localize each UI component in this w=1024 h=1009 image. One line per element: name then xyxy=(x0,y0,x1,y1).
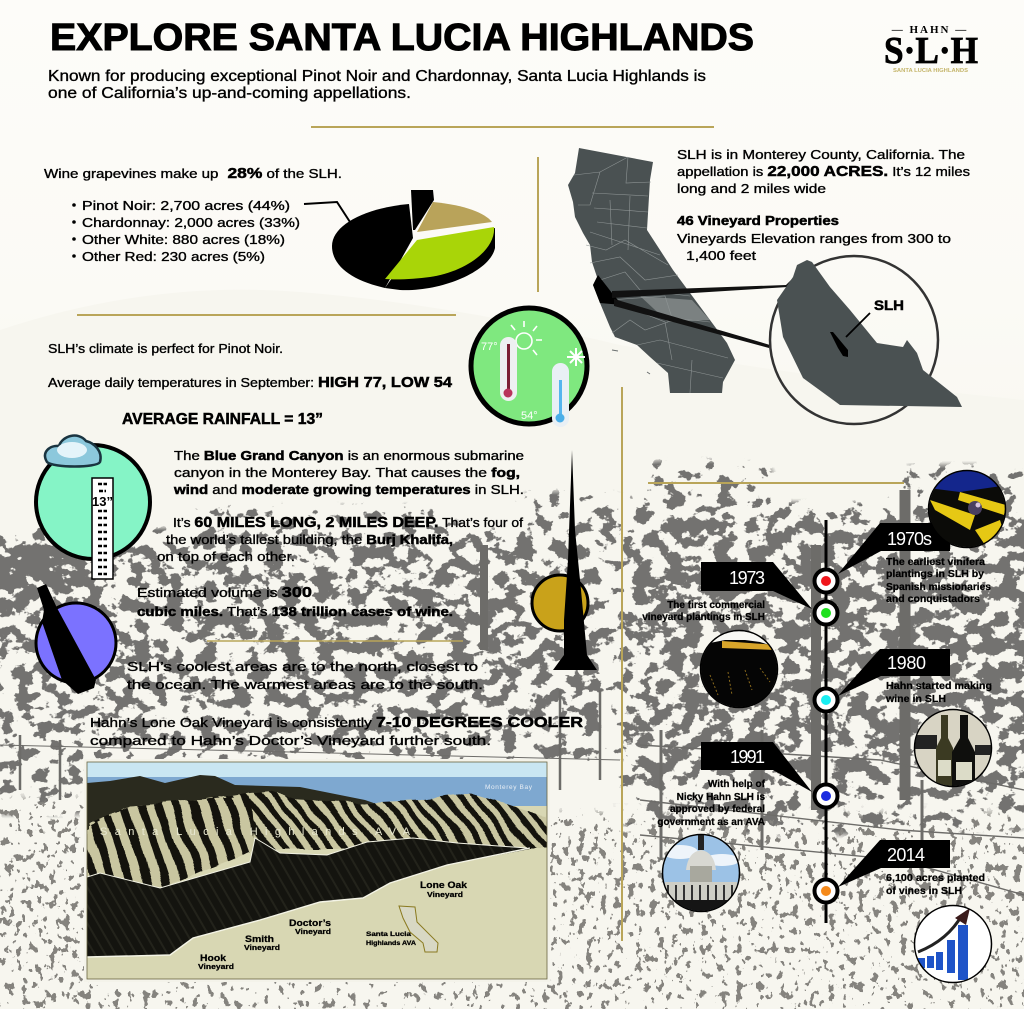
timeline xyxy=(642,520,992,923)
photo: vinifera planting xyxy=(928,470,1008,550)
climate text xyxy=(48,341,453,428)
vine acreage text: Other Red: 230 acres (5%) xyxy=(82,249,265,264)
vine acreage text: Other White: 880 acres (18%) xyxy=(82,232,285,247)
relief map of vineyards: Santa Lucia xyxy=(366,932,412,938)
logo: Hahn SLH: S·L·H xyxy=(884,30,978,72)
canyon text: The Blue Grand Canyon is an enormous submarine xyxy=(174,448,524,463)
icon: rain gauge and cloud: 13” xyxy=(92,494,113,509)
canyon text: on top of each other. xyxy=(157,549,295,564)
cooling text: SLH’s coolest areas are to the north, closest to xyxy=(127,659,478,674)
canyon text xyxy=(137,448,524,619)
flag 1970s xyxy=(838,523,950,574)
flag 1991 xyxy=(701,742,812,792)
photo: wine bottles xyxy=(914,710,993,790)
vine acreage text xyxy=(44,165,342,264)
relief map of vineyards: Vineyard xyxy=(427,892,463,899)
climate text: AVERAGE RAINFALL = 13” xyxy=(122,411,323,428)
icon: thermometers: 77° xyxy=(481,341,498,353)
intro text xyxy=(48,68,706,102)
flag 1973: 1973 xyxy=(729,568,766,588)
flag 1970s: 1970s xyxy=(887,529,933,549)
pie chart xyxy=(304,190,495,290)
title: EXPLORE SANTA LUCIA HIGHLANDS xyxy=(50,17,754,59)
timeline captions: approved by federal xyxy=(670,804,765,815)
icon: thermometers: 54° xyxy=(521,410,538,422)
timeline captions: government as an AVA xyxy=(657,817,765,828)
California county map xyxy=(568,148,735,393)
location text xyxy=(677,147,971,263)
location text: Vineyards Elevation ranges from 300 to xyxy=(677,231,951,246)
canyon text: the world’s tallest building, the Burj Khalifa, xyxy=(166,532,453,547)
photo: vineyard rows xyxy=(700,630,778,710)
timeline captions: of vines in SLH xyxy=(886,886,962,897)
timeline captions: Nicky Hahn SLH is xyxy=(677,792,765,803)
timeline captions: The first commercial xyxy=(667,600,765,611)
photo: growth chart xyxy=(914,905,993,983)
logo: Hahn SLH: SANTA LUCIA HIGHLANDS xyxy=(893,68,968,74)
vineyard background photograph xyxy=(0,290,1024,1009)
relief map of vineyards: Smith xyxy=(245,934,274,944)
relief map of vineyards: Santa Lucia Highlands AVA xyxy=(100,826,411,838)
timeline captions: The earliest vinifera xyxy=(886,557,985,568)
flag 2014: 2014 xyxy=(887,845,926,865)
canyon text: cubic miles. That’s 138 trillion cases of wine. xyxy=(137,604,453,619)
timeline captions: Spanish missionaries xyxy=(886,582,991,593)
relief map of vineyards: Vineyard xyxy=(198,964,234,971)
vine acreage text: Chardonnay: 2,000 acres (33%) xyxy=(82,215,300,230)
cooling text: the ocean. The warmest areas are to the south. xyxy=(127,677,483,692)
relief map of vineyards: Vineyard xyxy=(295,929,331,936)
flag 1973 xyxy=(701,562,812,609)
location text: appellation is 22,000 ACRES. It’s 12 miles xyxy=(677,163,971,180)
vine acreage text: Wine grapevines make up 28% of the SLH. xyxy=(44,165,342,182)
canyon text: wind and moderate growing temperatures in SLH. xyxy=(173,482,524,497)
flag 1980: 1980 xyxy=(887,653,927,673)
climate text: Average daily temperatures in September: HIGH 77, LOW 54 xyxy=(48,374,453,391)
canyon text: canyon in the Monterey Bay. That causes the fog, xyxy=(174,465,520,480)
intro text: one of California’s up-and-coming appellations. xyxy=(48,85,411,102)
relief map of vineyards: Doctor’s xyxy=(289,918,331,928)
relief map of vineyards: Vineyard xyxy=(244,945,280,952)
flag 2014 xyxy=(838,840,950,887)
icon: rain gauge and cloud xyxy=(36,436,150,579)
intro text: Known for producing exceptional Pinot Noir and Chardonnay, Santa Lucia Highlands is xyxy=(48,68,706,85)
timeline captions: With help of xyxy=(708,779,766,790)
timeline captions: and conquistadors xyxy=(886,594,980,605)
inset: Monterey County with SLH xyxy=(612,256,962,424)
location text: long and 2 miles wide xyxy=(677,181,826,196)
icon: thermometers xyxy=(471,308,587,427)
canyon text: Estimated volume is 300 xyxy=(137,584,312,601)
location text: 46 Vineyard Properties xyxy=(677,213,839,228)
cooling text: compared to Hahn’s Doctor’s Vineyard further south. xyxy=(90,733,491,748)
timeline captions: vineyard plantings in SLH xyxy=(642,612,765,623)
relief map of vineyards xyxy=(84,759,550,982)
location text: 1,400 feet xyxy=(686,248,756,263)
flag 1991: 1991 xyxy=(730,747,766,767)
photo: US Capitol xyxy=(662,834,740,912)
icon: wine bottle xyxy=(36,584,116,694)
icon: Burj Khalifa xyxy=(532,450,597,670)
vine acreage text: Pinot Noir: 2,700 acres (44%) xyxy=(82,198,290,213)
canyon text: It’s 60 MILES LONG, 2 MILES DEEP. That’s four of xyxy=(173,514,523,531)
timeline captions: 6,100 acres planted xyxy=(886,873,985,884)
relief map of vineyards: Hook xyxy=(200,953,227,963)
inset: Monterey County with SLH: SLH xyxy=(874,297,904,313)
cooling text: Hahn’s Lone Oak Vineyard is consistently 7-10 DEGREES COOLER xyxy=(90,714,583,731)
relief map of vineyards: Highlands AVA xyxy=(366,941,417,947)
location text: SLH is in Monterey County, California. The xyxy=(677,147,965,162)
relief map of vineyards: Monterey Bay xyxy=(485,784,533,791)
relief map of vineyards: Lone Oak xyxy=(420,880,468,890)
timeline captions: wine in SLH xyxy=(885,694,946,705)
timeline nodes xyxy=(814,570,838,902)
timeline captions: plantings in SLH by xyxy=(886,569,984,580)
timeline captions xyxy=(642,557,992,897)
logo: Hahn SLH: — HAHN — xyxy=(891,24,968,36)
timeline captions: Hahn started making xyxy=(886,681,992,692)
flag 1980 xyxy=(838,649,950,696)
climate text: SLH’s climate is perfect for Pinot Noir. xyxy=(48,341,283,356)
cooling text xyxy=(90,659,583,748)
